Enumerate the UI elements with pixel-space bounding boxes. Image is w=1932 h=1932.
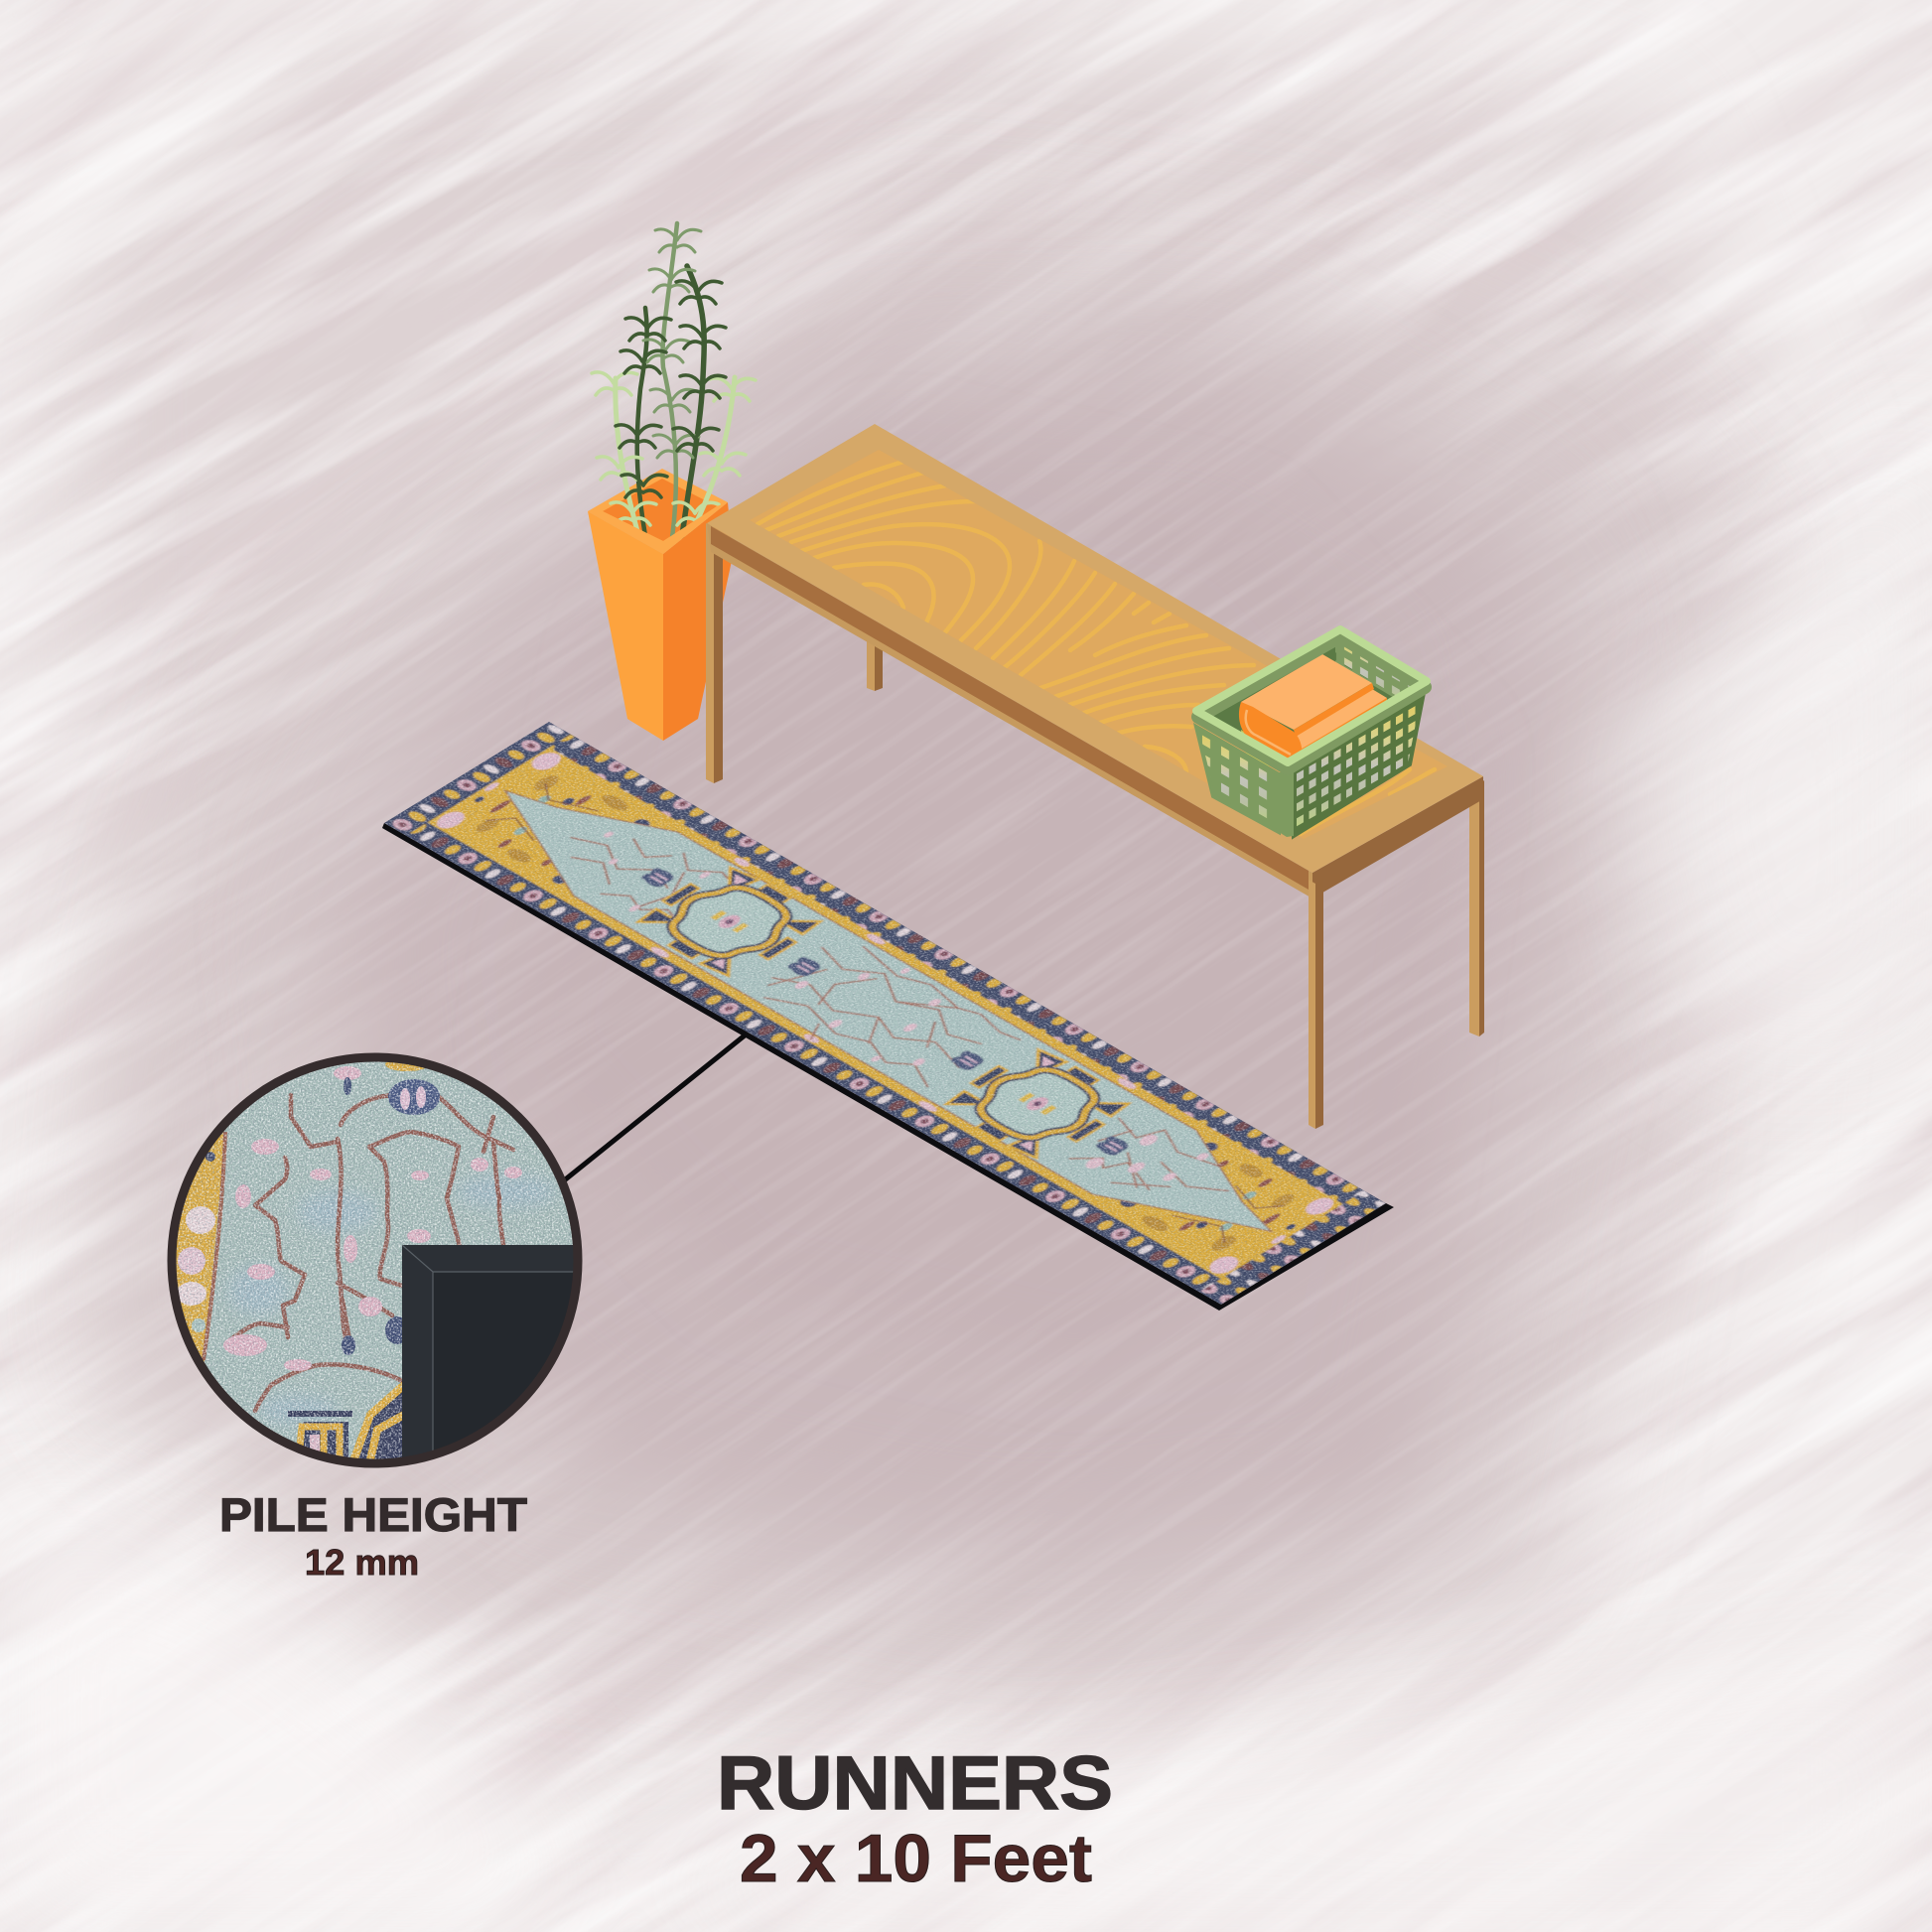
lens pink flowers [223, 1066, 522, 1371]
rug patterned borders [384, 722, 1386, 1305]
rug pile texture [384, 722, 1386, 1305]
lens bottom medallion motif [288, 1382, 404, 1469]
table [706, 424, 1484, 1129]
rug runner [382, 722, 1394, 1311]
pile height value: 12 mm [305, 1542, 419, 1583]
rug medallion 2 [936, 1043, 1139, 1164]
basket corner post [1279, 771, 1294, 837]
lens gold top motif [385, 1057, 429, 1071]
lens blue mottling [228, 1175, 556, 1424]
basket interior [1198, 632, 1425, 759]
lens navy bud [388, 1079, 440, 1115]
rug veins [517, 806, 1258, 1236]
back leg [867, 635, 883, 691]
lens small navy accents [342, 1077, 409, 1355]
subtitle: size: 2 x 10 Feet [740, 1821, 1092, 1896]
rug artwork [384, 722, 1386, 1305]
lens backing corner [402, 1245, 592, 1485]
connector line [563, 1035, 745, 1181]
bright corners [0, 417, 1932, 1932]
pot rim and interior [588, 469, 728, 554]
laundry basket with towels [1196, 629, 1427, 837]
rug gold band and spandrels [427, 748, 1343, 1279]
towels [1239, 654, 1387, 769]
pot faces [588, 502, 733, 741]
rug field [450, 760, 1320, 1266]
front leg [1309, 879, 1323, 1129]
lens veins [228, 1095, 513, 1411]
lens contents [159, 1047, 592, 1485]
lens gold border strip [159, 1122, 225, 1370]
plant [592, 223, 756, 538]
basket right face [1294, 698, 1423, 836]
rug surface [384, 722, 1386, 1305]
rug medallion 1 [628, 862, 831, 982]
basket left face [1196, 727, 1279, 832]
magnifier lens: pile detail [159, 1047, 592, 1485]
rug thickness [382, 823, 1394, 1311]
pile height label: PILE HEIGHT [219, 1488, 527, 1541]
left leg [706, 523, 723, 783]
pot with plant [588, 223, 756, 741]
table top [707, 424, 1483, 873]
apron [707, 523, 1483, 898]
rug buds [632, 866, 1138, 1158]
lens pile texture [164, 1047, 591, 1474]
right leg [1469, 780, 1484, 1036]
title: RUNNERS [717, 1741, 1113, 1826]
lens ring [172, 1057, 578, 1463]
basket rim [1196, 629, 1427, 768]
rug pink flowers [543, 813, 1222, 1207]
wood grain [758, 461, 1435, 834]
